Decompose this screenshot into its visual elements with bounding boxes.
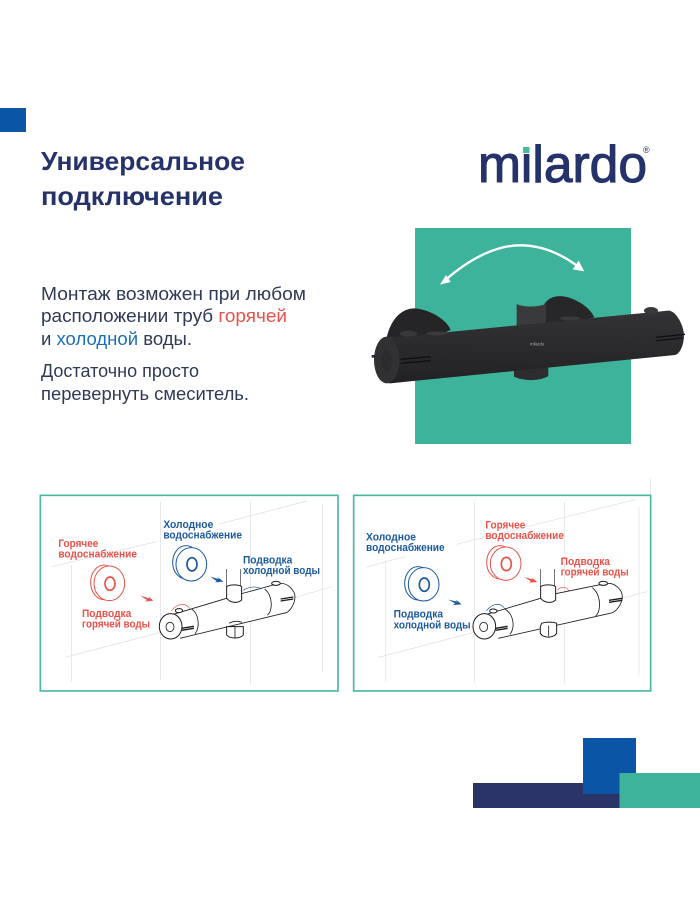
hot water supply ring: [91, 565, 125, 601]
labels: водоснабжение: [163, 529, 242, 541]
labels: холодной воды: [394, 619, 471, 631]
green square behind product: [415, 228, 631, 444]
body brand mark: milardo: [530, 342, 545, 347]
labels: водоснабжение: [366, 542, 445, 554]
mixer body: [375, 311, 684, 383]
product: black thermostatic mixer: [372, 245, 685, 383]
panel frame: [40, 495, 338, 691]
cold water supply ring: [405, 567, 439, 601]
mixer line drawing: [159, 569, 295, 639]
labels: горячей воды: [561, 567, 629, 579]
description text: расположении труб горячей: [41, 305, 287, 326]
labels: Холодное: [366, 531, 416, 543]
wall plates: [387, 308, 451, 340]
title: подключение: [41, 181, 223, 211]
labels: водоснабжение: [58, 548, 137, 560]
cold water supply ring: [173, 546, 207, 581]
description text: перевернуть смеситель.: [41, 383, 249, 404]
description text: и холодной воды.: [41, 328, 192, 349]
labels: горячей воды: [82, 619, 150, 631]
labels: Горячее: [58, 538, 98, 550]
labels: Подводка: [243, 554, 293, 566]
panel frame: [354, 495, 651, 691]
top knobs: [400, 331, 417, 337]
mixer line drawing: [473, 569, 622, 639]
labels: Холодное: [163, 519, 213, 531]
labels: Горячее: [485, 519, 525, 531]
labels: Подводка: [82, 608, 132, 620]
corner accent square: [0, 108, 26, 132]
description text: Достаточно просто: [41, 360, 199, 381]
wall lines: [367, 500, 647, 683]
panel: left connection diagram: [40, 495, 338, 691]
wall lines: [52, 501, 332, 684]
footer decorative blocks: [473, 738, 700, 808]
labels: Подводка: [394, 608, 444, 620]
logo: milardo: milardo: [478, 136, 647, 194]
labels: холодной воды: [243, 565, 320, 577]
title: Универсальное: [41, 146, 245, 176]
description text: Монтаж возможен при любом: [41, 283, 306, 304]
labels: [366, 519, 629, 631]
upper connector: [517, 304, 546, 330]
arrows: [448, 600, 462, 605]
arrows: [140, 596, 153, 602]
hot water supply ring: [487, 546, 521, 580]
outer wall line above frame: [649, 478, 651, 495]
labels: водоснабжение: [485, 530, 564, 542]
left cap: [374, 337, 399, 383]
title: [41, 146, 245, 211]
rotation arrow: [440, 245, 584, 285]
description text: [41, 283, 306, 404]
logo: milardo: ®: [643, 145, 650, 155]
labels: [58, 519, 320, 631]
slots: [401, 357, 431, 363]
labels: Подводка: [561, 556, 611, 568]
lower connector: [514, 362, 548, 380]
panel: right connection diagram: [354, 478, 651, 691]
